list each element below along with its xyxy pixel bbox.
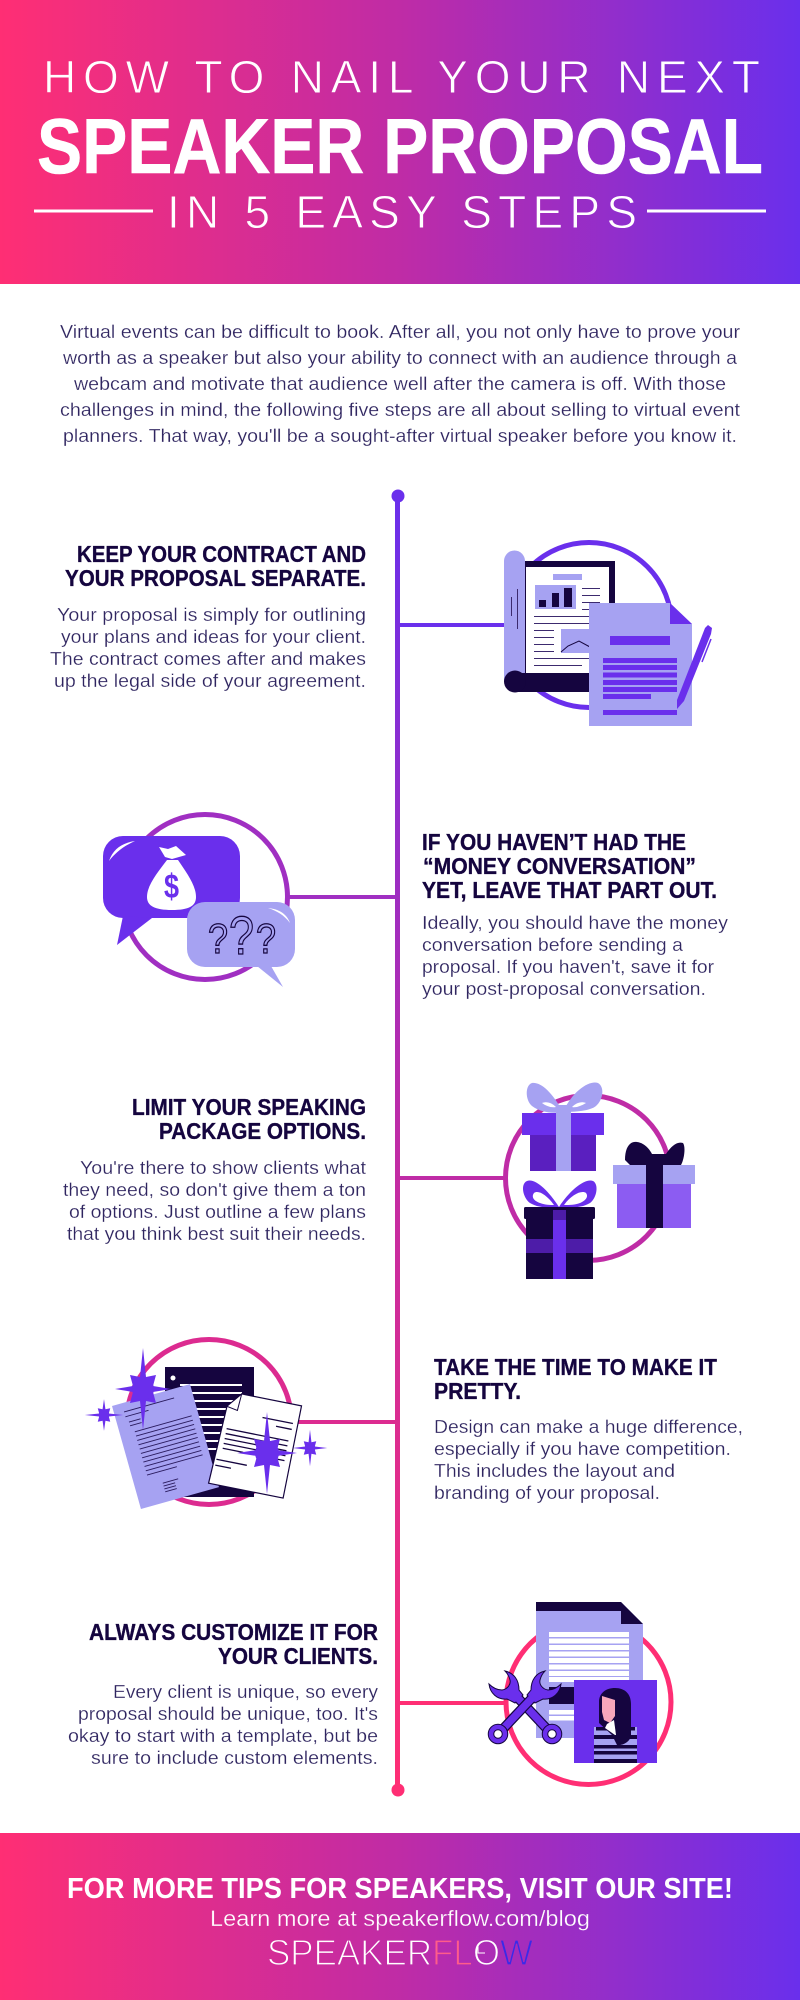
gift 1 xyxy=(522,1082,604,1171)
step 4 body: branding of your proposal. xyxy=(434,1483,660,1503)
title line 3: IN 5 EASY STEPS xyxy=(167,186,637,238)
step 4 body xyxy=(434,1417,743,1503)
step 3 body: of options. Just outline a few plans xyxy=(69,1202,366,1222)
step 5 heading: ALWAYS CUSTOMIZE IT FOR xyxy=(89,1619,378,1645)
step 1 heading xyxy=(65,541,366,591)
step 1 body: The contract comes after and makes xyxy=(50,649,366,669)
step 3 body xyxy=(63,1158,366,1244)
wrench left xyxy=(489,1671,559,1741)
connector 3 xyxy=(400,1176,505,1180)
connector 4 xyxy=(292,1420,395,1424)
footer heading: FOR MORE TIPS FOR SPEAKERS, VISIT OUR SITE! xyxy=(67,1873,733,1905)
step 2 heading: IF YOU HAVEN’T HAD THE xyxy=(422,829,686,855)
step 1 body: Your proposal is simply for outlining xyxy=(57,605,366,625)
question marks: ? xyxy=(256,915,276,962)
step 1 body xyxy=(50,605,366,691)
step 5 body: Every client is unique, so every xyxy=(113,1682,378,1702)
SpeakerFlow logo: SPEAKERFLOW xyxy=(267,1932,533,1973)
intro paragraph: Virtual events can be difficult to book. After all, you not only have to prove your xyxy=(60,322,740,342)
step 5 heading: YOUR CLIENTS. xyxy=(218,1643,378,1669)
photo of woman xyxy=(574,1680,657,1763)
question marks: ? xyxy=(229,906,254,966)
step 1 body: up the legal side of your agreement. xyxy=(54,671,366,691)
header banner xyxy=(0,0,800,284)
gift 3 xyxy=(523,1181,597,1279)
title line 3 xyxy=(34,186,766,238)
step 1 body: your plans and ideas for your client. xyxy=(61,627,366,647)
step 4 body: Design can make a huge difference, xyxy=(434,1417,743,1437)
step 1 xyxy=(50,541,712,726)
connector 1 xyxy=(400,623,505,627)
step 2 body: Ideally, you should have the money xyxy=(422,913,728,933)
intro paragraph: challenges in mind, the following five steps are all about selling to virtual event xyxy=(60,400,740,420)
step 3 xyxy=(63,1082,695,1279)
intro paragraph: planners. That way, you'll be a sought-after virtual speaker before you know it. xyxy=(63,426,737,446)
timeline xyxy=(392,490,404,1796)
step 4 body: This includes the layout and xyxy=(434,1461,675,1481)
step 3 body: they need, so don't give them a ton xyxy=(63,1180,366,1200)
connector 2 xyxy=(288,895,395,899)
step 5 body: proposal should be unique, too. It's xyxy=(78,1704,378,1724)
step 4 heading: PRETTY. xyxy=(434,1378,521,1404)
money bag xyxy=(147,846,196,910)
step 3 heading: PACKAGE OPTIONS. xyxy=(159,1118,366,1144)
question marks: ? xyxy=(208,915,228,962)
sparkle small right xyxy=(293,1430,327,1466)
wrench right xyxy=(491,1671,561,1741)
step 4 heading xyxy=(434,1354,717,1404)
step 5 body: sure to include custom elements. xyxy=(91,1748,378,1768)
sparkle large left xyxy=(115,1348,171,1430)
step 2 body: conversation before sending a xyxy=(422,935,684,955)
step 3 heading: LIMIT YOUR SPEAKING xyxy=(132,1094,366,1120)
intro paragraph xyxy=(60,322,740,446)
step 3 body: that you think best suit their needs. xyxy=(67,1224,366,1244)
step 5 body xyxy=(68,1682,378,1768)
question marks xyxy=(208,906,276,966)
step 2 body xyxy=(422,913,728,999)
step 2 xyxy=(103,814,728,999)
step 4 body: especially if you have competition. xyxy=(434,1439,731,1459)
icon: gift boxes xyxy=(506,1082,695,1279)
step 3 heading xyxy=(132,1094,366,1144)
connector 5 xyxy=(400,1701,505,1705)
step 4 xyxy=(85,1340,743,1509)
intro paragraph: webcam and motivate that audience well after the camera is off. With those xyxy=(73,374,726,394)
money bag: $ xyxy=(164,868,179,906)
gift 2 xyxy=(613,1142,695,1228)
intro paragraph: worth as a speaker but also your ability to connect with an audience through a xyxy=(62,348,738,368)
footer link text: Learn more at speakerflow.com/blog xyxy=(210,1906,590,1931)
step 2 heading: YET, LEAVE THAT PART OUT. xyxy=(422,877,717,903)
white document xyxy=(209,1391,302,1498)
step 2 body: your post-proposal conversation. xyxy=(422,979,706,999)
step 5 heading xyxy=(89,1619,378,1669)
step 1 heading: YOUR PROPOSAL SEPARATE. xyxy=(65,565,366,591)
icon: polished documents with sparkles xyxy=(85,1340,327,1509)
step 5 xyxy=(68,1602,671,1784)
step 4 heading: TAKE THE TIME TO MAKE IT xyxy=(434,1354,717,1380)
footer banner xyxy=(0,1833,800,2000)
icon: custom template document xyxy=(489,1602,671,1784)
step 1 heading: KEEP YOUR CONTRACT AND xyxy=(77,541,366,567)
icon: money and question speech bubbles xyxy=(103,814,295,987)
step 2 heading xyxy=(422,829,717,903)
sparkle small left xyxy=(85,1399,123,1431)
step 2 body: proposal. If you haven't, save it for xyxy=(422,957,714,977)
icon: documents and pen xyxy=(504,542,712,726)
light document xyxy=(112,1384,219,1509)
step 5 body: okay to start with a template, but be xyxy=(68,1726,378,1746)
title line 1: HOW TO NAIL YOUR NEXT xyxy=(43,51,760,103)
sparkle large right xyxy=(237,1412,297,1494)
step 2 heading: “MONEY CONVERSATION” xyxy=(423,853,696,879)
step 3 body: You're there to show clients what xyxy=(80,1158,366,1178)
